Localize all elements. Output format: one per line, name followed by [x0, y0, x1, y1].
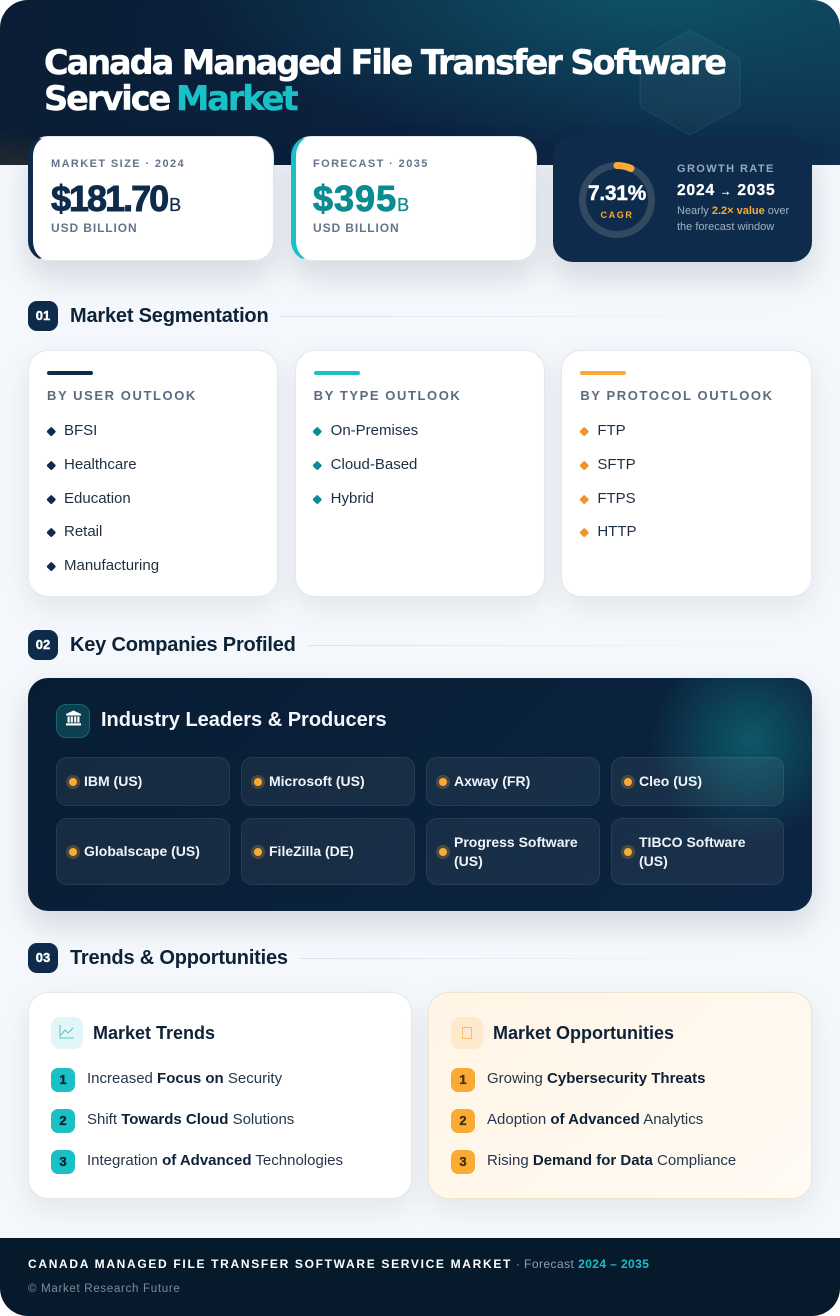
panel: industry leaders: (US)	[454, 852, 483, 868]
panel: by user outlook: BFSI	[64, 422, 97, 439]
company chips	[56, 757, 230, 806]
panel: industry leaders	[28, 678, 812, 911]
footer credit: © Market Research Future	[28, 1283, 180, 1295]
icon: placeholder glyph	[451, 1017, 483, 1049]
section heading: key companies: 02	[36, 637, 50, 652]
panel: by user outlook: Manufacturing	[64, 557, 159, 574]
panel: market trends: 1	[59, 1072, 67, 1087]
stat card: market size	[28, 136, 274, 261]
CAGR ring	[579, 162, 655, 238]
panel: market opportunities	[428, 992, 812, 1199]
icon: chart	[51, 1017, 83, 1049]
decorative hexagon	[640, 30, 740, 136]
panel title: Industry Leaders & Producers	[101, 709, 387, 731]
section heading: key companies: Key Companies Profiled	[70, 634, 296, 656]
stat card: growth rate: 2024 → 2035	[677, 182, 776, 199]
panel: industry leaders: Microsoft (US)	[269, 773, 365, 789]
panel: by protocol outlook: HTTP	[597, 523, 636, 540]
stat card: forecast: USD BILLION	[313, 221, 400, 235]
panel: industry leaders: TIBCO Software	[639, 834, 746, 850]
panel: by type outlook: BY TYPE OUTLOOK	[314, 388, 461, 403]
panel: market trends: 3	[59, 1154, 67, 1169]
panel: by protocol outlook: FTP	[597, 422, 626, 439]
stat card: market size: MARKET SIZE · 2024	[51, 158, 185, 170]
panel: by user outlook: Healthcare	[64, 456, 137, 473]
panel: market opportunities: 1	[459, 1072, 467, 1087]
panel: by protocol outlook: SFTP	[597, 456, 636, 473]
growth rate text: GROWTH RATE	[677, 163, 775, 175]
section heading: market segmentation: Market Segmentation	[70, 305, 268, 327]
panel: by type outlook: Cloud-Based	[331, 456, 417, 473]
panel: by protocol outlook	[561, 350, 812, 597]
stat card: growth rate: Nearly 2.2× value over	[677, 205, 789, 217]
stat card: market size: USD BILLION	[51, 221, 138, 235]
panel: industry leaders: Globalscape (US)	[84, 843, 200, 859]
stat card: forecast: FORECAST · 2035	[313, 158, 429, 170]
panel: by user outlook: BY USER OUTLOOK	[47, 388, 197, 403]
stat card: growth rate: the forecast window	[677, 221, 774, 233]
panel: market trends: Increased Focus on Security	[87, 1070, 282, 1087]
icon: bank	[56, 704, 90, 738]
panel: by type outlook: Hybrid	[331, 490, 374, 507]
footer	[0, 1238, 840, 1316]
section heading: key companies	[28, 630, 626, 660]
panel: by user outlook: Education	[64, 490, 131, 507]
panel: by type outlook	[295, 350, 545, 597]
section heading: market segmentation: 01	[36, 308, 50, 323]
stat card: forecast	[291, 136, 537, 261]
section heading: trends: 03	[36, 950, 50, 965]
footer title: CANADA MANAGED FILE TRANSFER SOFTWARE SERVICE MARKET · Forecast 2024 – 2035	[28, 1257, 649, 1271]
title	[44, 43, 726, 118]
section heading: market segmentation	[28, 301, 612, 331]
panel: market opportunities: Adoption of Advanced Analytics	[487, 1111, 703, 1128]
panel: market opportunities: Rising Demand for Data Compliance	[487, 1152, 736, 1169]
section heading: trends	[28, 943, 598, 973]
title: Canada Managed File Transfer Software	[44, 43, 725, 82]
panel: market trends: Market Trends	[93, 1023, 215, 1043]
CAGR label: CAGR	[601, 210, 633, 220]
panel: industry leaders: Axway (FR)	[454, 773, 530, 789]
panel: by type outlook: On-Premises	[331, 422, 418, 439]
panel: market opportunities: Growing Cybersecurity Threats	[487, 1070, 705, 1087]
panel: industry leaders: (US)	[639, 852, 668, 868]
panel: by protocol outlook: BY PROTOCOL OUTLOOK	[580, 388, 774, 403]
panel: industry leaders: Cleo (US)	[639, 773, 702, 789]
panel: market trends: Shift Towards Cloud Solutions	[87, 1111, 294, 1128]
stat card: growth rate	[553, 136, 812, 262]
panel: by protocol outlook: FTPS	[597, 490, 636, 507]
panel: industry leaders: FileZilla (DE)	[269, 843, 354, 859]
panel: market trends: Integration of Advanced Technologies	[87, 1152, 343, 1169]
panel: market trends: 2	[59, 1113, 67, 1128]
panel: by user outlook: Retail	[64, 523, 102, 540]
stat card: forecast: $395B	[313, 178, 409, 219]
panel: market opportunities: 3	[459, 1154, 467, 1169]
panel: market opportunities: Market Opportunities	[493, 1023, 674, 1043]
company chips: IBM (US)	[84, 773, 142, 789]
header banner	[0, 0, 840, 165]
panel: industry leaders: Progress Software	[454, 834, 578, 850]
CAGR value: 7.31%	[588, 182, 646, 205]
stat card: market size: $181.70B	[51, 178, 181, 219]
title: Service Market	[44, 79, 297, 118]
panel: market trends	[28, 992, 412, 1199]
section heading: trends: Trends & Opportunities	[70, 947, 288, 969]
panel: by user outlook	[28, 350, 278, 597]
panel: market opportunities: 2	[459, 1113, 467, 1128]
